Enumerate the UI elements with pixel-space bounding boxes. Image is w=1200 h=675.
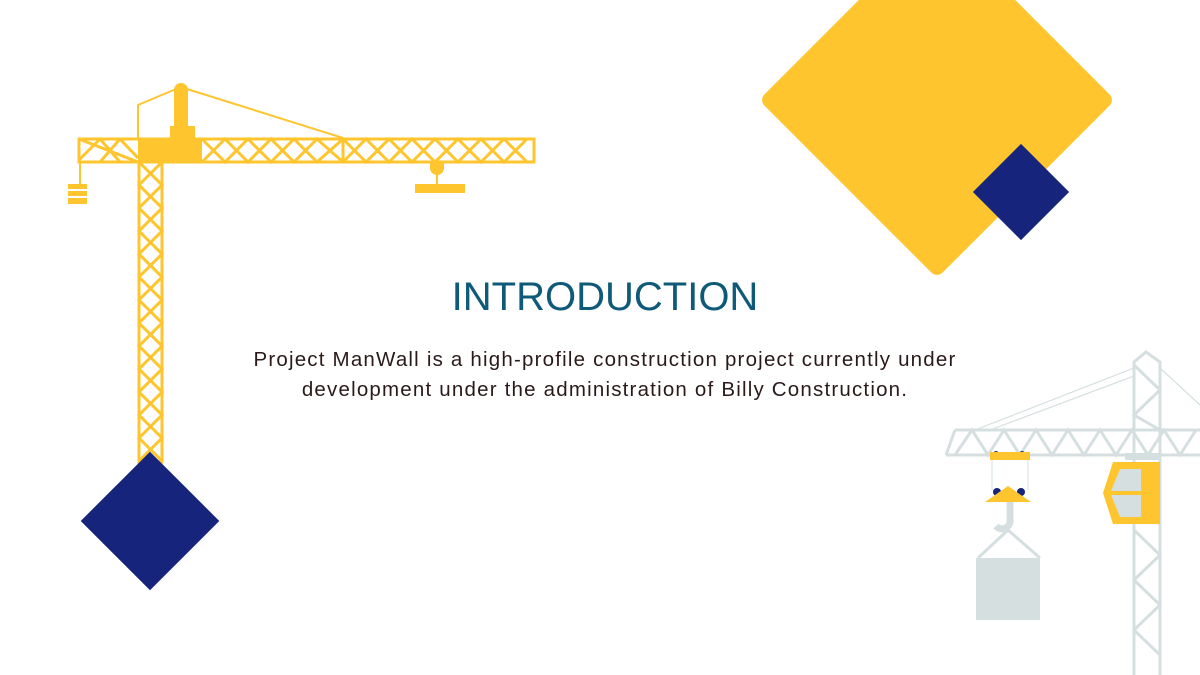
icon: navy diamond left [81, 452, 219, 590]
icon: right grey crane [946, 352, 1200, 675]
body text: Project ManWall is a high-profile construction project currently under development under the administration of Billy Construction. [253, 348, 957, 401]
icon: yellow diamond [759, 0, 1115, 278]
icon: left yellow crane [79, 89, 534, 462]
icon: small navy diamond [973, 144, 1069, 240]
title: INTRODUCTION [452, 275, 758, 319]
